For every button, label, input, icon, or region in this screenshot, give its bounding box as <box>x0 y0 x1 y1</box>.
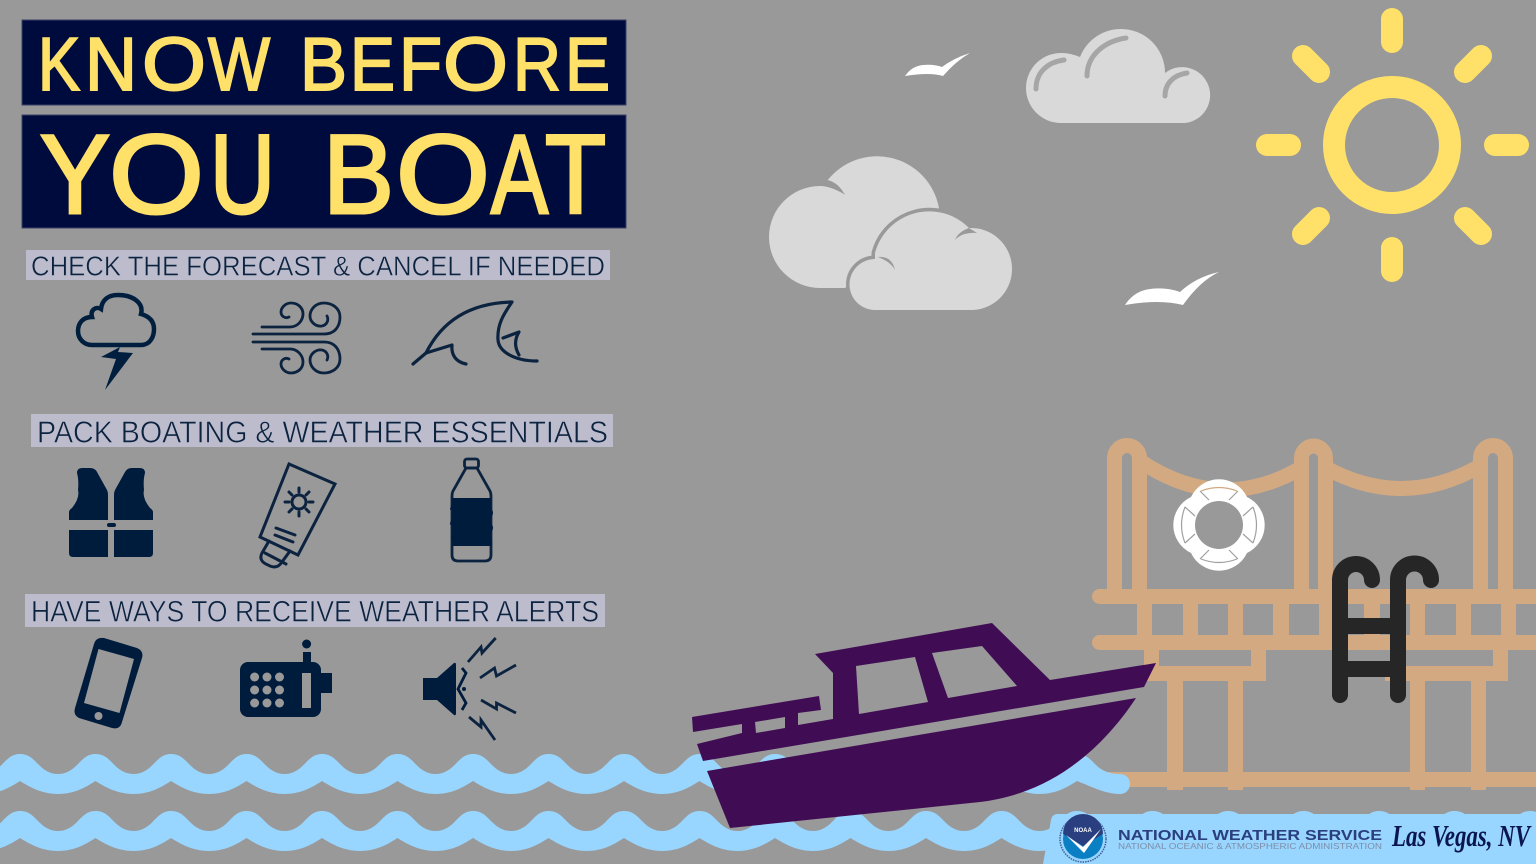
water waves: lower band <box>0 811 1536 851</box>
life ring <box>1173 479 1265 571</box>
footer: nws las vegas banner <box>1043 814 1536 864</box>
title: know before you boat <box>22 20 626 237</box>
title banner: know before: N <box>85 22 137 106</box>
icon: wave <box>413 302 537 364</box>
title banner: know before: W <box>208 22 270 106</box>
boat <box>692 623 1156 828</box>
section: weather alerts <box>25 594 605 740</box>
icon: siren speaker <box>423 638 516 740</box>
title banner: know before <box>22 20 626 106</box>
title banner: know before: K <box>38 22 80 106</box>
noaa logo <box>1060 814 1106 862</box>
icon: wind <box>253 303 340 373</box>
bird: small <box>905 53 970 76</box>
title banner: know before: E <box>565 22 610 106</box>
dock rails <box>1092 589 1536 790</box>
title banner: you boat: O <box>109 112 204 237</box>
title banner: you boat: A <box>491 112 548 237</box>
section: check the forecast <box>26 250 610 390</box>
title banner: you boat <box>22 112 626 237</box>
noaa logo: NOAA <box>1074 828 1092 834</box>
title banner: know before: E <box>350 22 395 106</box>
title banner: know before: F <box>399 22 442 106</box>
agency name: NATIONAL WEATHER SERVICE <box>1118 827 1382 844</box>
sun <box>1267 19 1518 271</box>
icon: thunderstorm cloud <box>78 295 154 390</box>
title banner: you boat: B <box>323 112 394 237</box>
dock <box>1092 446 1536 790</box>
title banner: you boat: T <box>545 112 606 237</box>
cloud: large pair <box>769 156 1012 310</box>
footer background <box>1043 814 1536 864</box>
icon: smartphone <box>74 638 142 728</box>
heading: pack essentials: PACK BOATING & WEATHER ESSENTIALS <box>37 414 608 450</box>
title banner: you boat: U <box>210 112 275 237</box>
title banner: know before: R <box>513 22 561 106</box>
title banner: know before: O <box>443 22 508 106</box>
title banner: know before: B <box>300 22 347 106</box>
icon: water bottle <box>450 459 493 561</box>
cloud: upper <box>1026 29 1210 123</box>
title banner: you boat: Y <box>40 112 110 237</box>
agency name: NATIONAL OCEANIC & ATMOSPHERIC ADMINISTRATION <box>1118 841 1382 851</box>
boat cabin and deck <box>692 623 1156 761</box>
boat hull <box>707 698 1136 828</box>
pool ladder <box>1340 564 1431 695</box>
icon: weather radio <box>240 640 332 717</box>
icon: life jacket <box>69 468 153 557</box>
agency name <box>1118 827 1382 851</box>
bird: large <box>1125 272 1219 305</box>
icon: sunscreen tube <box>260 464 335 567</box>
water waves: upper band <box>0 754 1130 794</box>
title banner: know before: O <box>142 22 206 106</box>
dock posts and ropes <box>1114 446 1506 592</box>
title banner: you boat: O <box>396 112 490 237</box>
heading: weather alerts: HAVE WAYS TO RECEIVE WEATHER ALERTS <box>31 596 599 628</box>
section: pack essentials <box>31 414 613 567</box>
heading: check the forecast: CHECK THE FORECAST & CANCEL IF NEEDED <box>31 250 605 282</box>
